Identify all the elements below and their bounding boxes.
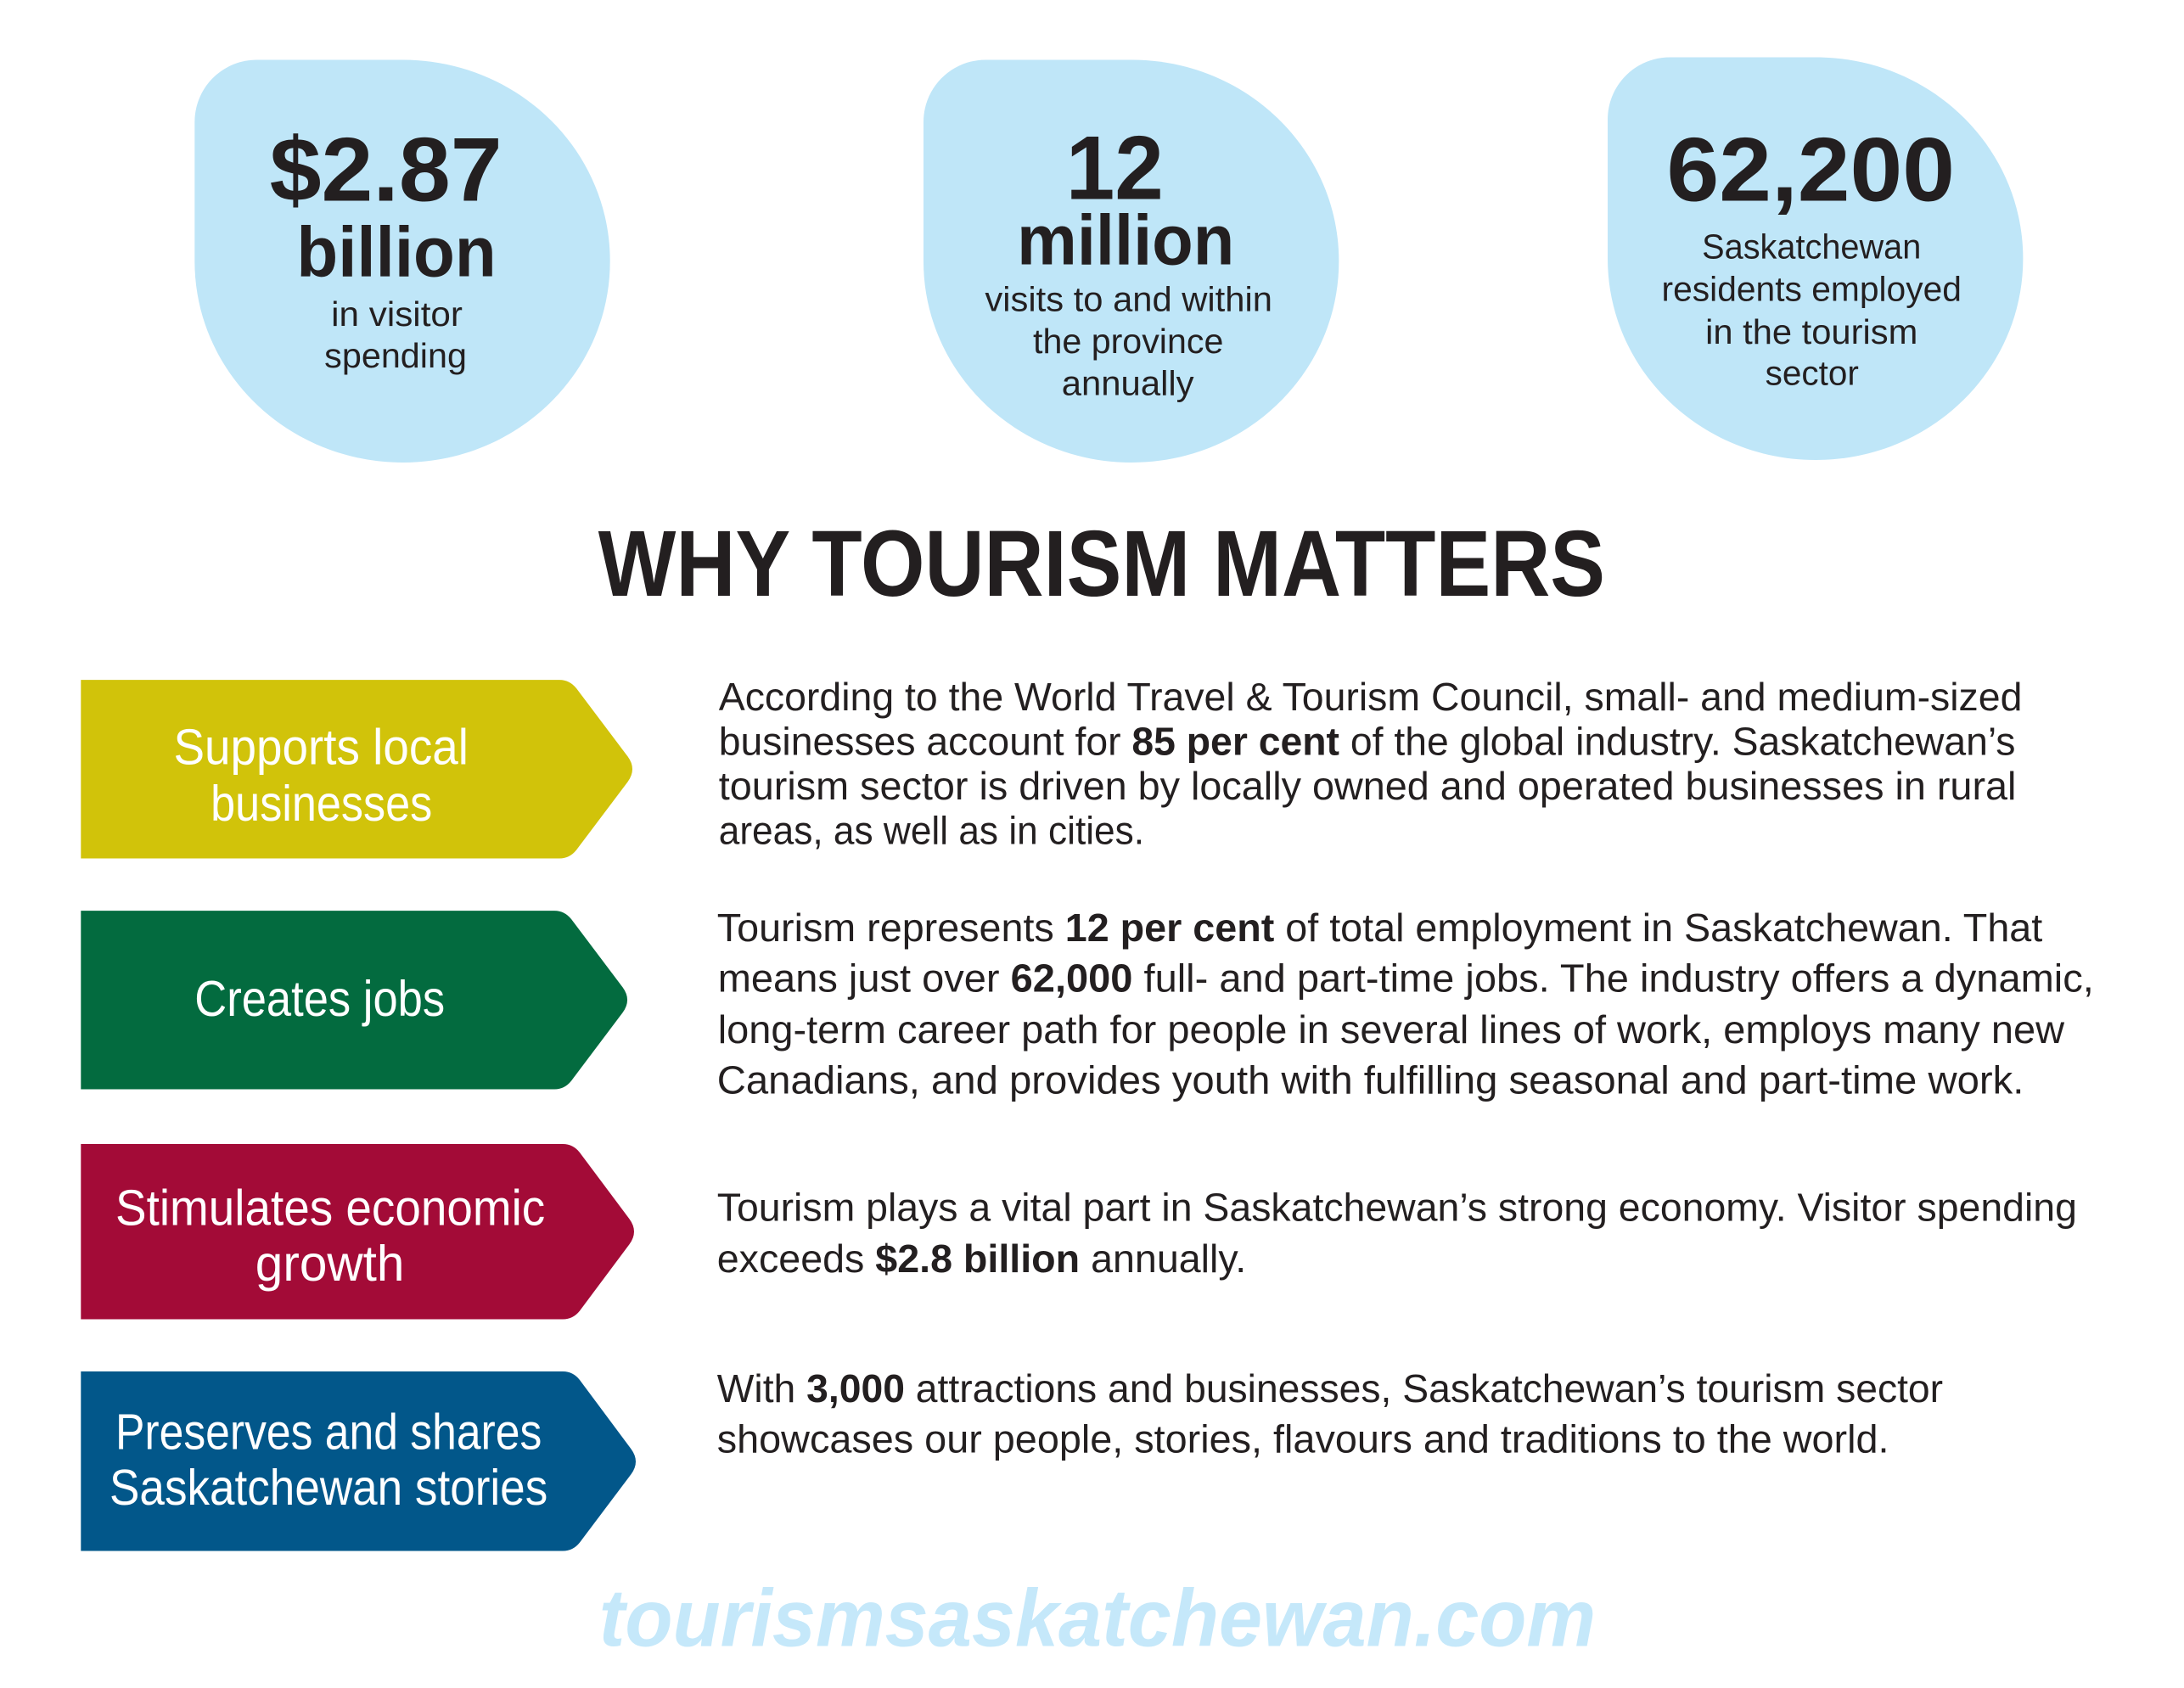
stat number: 62,200: [1666, 118, 1955, 220]
stat description: sector: [1766, 354, 1859, 393]
stat description: [985, 279, 1272, 403]
stat unit: million: [1017, 201, 1234, 280]
panel: employment stat: [1608, 58, 2023, 460]
arrow: stimulates economic growth: Stimulates economic: [115, 1179, 545, 1236]
text: stimulates economic growth: [717, 1185, 2077, 1281]
arrow: stimulates economic growth: [81, 1144, 634, 1320]
stat description: Saskatchewan: [1702, 227, 1921, 266]
arrow: preserves and shares stories: Preserves and shares: [115, 1403, 542, 1460]
text: stimulates economic growth: Tourism plays a vital part in Saskatchewan’s strong economy. Visitor spending: [717, 1185, 2077, 1229]
panel: visitor spending stat: [194, 59, 610, 463]
shape: blue drop: [194, 59, 610, 463]
stat number: $2.87: [270, 118, 502, 220]
stat description: in visitor: [331, 294, 463, 334]
stat description: visits to and within: [985, 279, 1272, 318]
stat description: [1662, 227, 1962, 393]
arrow: supports local businesses: [81, 680, 632, 859]
text: creates jobs: Canadians, and provides youth with fulfilling seasonal and part-time work.: [717, 1057, 2024, 1102]
stat description: residents employed: [1662, 269, 1962, 308]
text: preserves and shares stories: [717, 1366, 1943, 1461]
text: supports local businesses: According to the World Travel & Tourism Council, small- and medium-sized: [719, 675, 2022, 719]
text: creates jobs: [717, 906, 2094, 1102]
stat description: in the tourism: [1705, 312, 1917, 351]
panel: annual visits stat: [924, 59, 1339, 463]
arrow: supports local businesses: businesses: [211, 775, 432, 832]
shape: blue drop: [1608, 58, 2023, 460]
arrow: stimulates economic growth: growth: [255, 1235, 404, 1292]
arrow: preserves and shares stories: [81, 1371, 636, 1551]
text: supports local businesses: tourism sector is driven by locally owned and operated businesses in rural: [719, 764, 2016, 808]
stat description: annually: [1062, 364, 1194, 403]
text: creates jobs: Tourism represents 12 per cent of total employment in Saskatchewan. That: [717, 906, 2042, 950]
stat description: spending: [324, 336, 467, 375]
arrow: preserves and shares stories: Saskatchewan stories: [109, 1459, 547, 1516]
arrow: creates jobs: Creates jobs: [194, 970, 445, 1027]
arrow: creates jobs: [81, 911, 627, 1090]
stat description: the province: [1033, 322, 1223, 361]
text: preserves and shares stories: showcases our people, stories, flavours and traditions to the world.: [717, 1416, 1889, 1461]
stat number: 12: [1066, 116, 1164, 218]
stat description: [324, 294, 467, 375]
footer website address: tourismsaskatchewan.com: [599, 1574, 1596, 1664]
text: preserves and shares stories: With 3,000 attractions and businesses, Saskatchewan’s tourism sector: [717, 1366, 1943, 1410]
text: supports local businesses: areas, as well as in cities.: [719, 809, 1144, 853]
text: creates jobs: means just over 62,000 full- and part-time jobs. The industry offers a dynamic,: [718, 956, 2094, 1000]
text: creates jobs: long-term career path for people in several lines of work, employs many new: [718, 1007, 2064, 1051]
text: stimulates economic growth: exceeds $2.8 billion annually.: [717, 1237, 1246, 1281]
shape: blue drop: [924, 59, 1339, 463]
arrow: supports local businesses: Supports local: [173, 718, 469, 775]
title: WHY TOURISM MATTERS: [598, 512, 1605, 616]
text: supports local businesses: businesses account for 85 per cent of the global industry. Saskatchewan’s: [719, 719, 2015, 763]
stat unit: billion: [296, 213, 497, 292]
text: supports local businesses: [719, 675, 2022, 853]
